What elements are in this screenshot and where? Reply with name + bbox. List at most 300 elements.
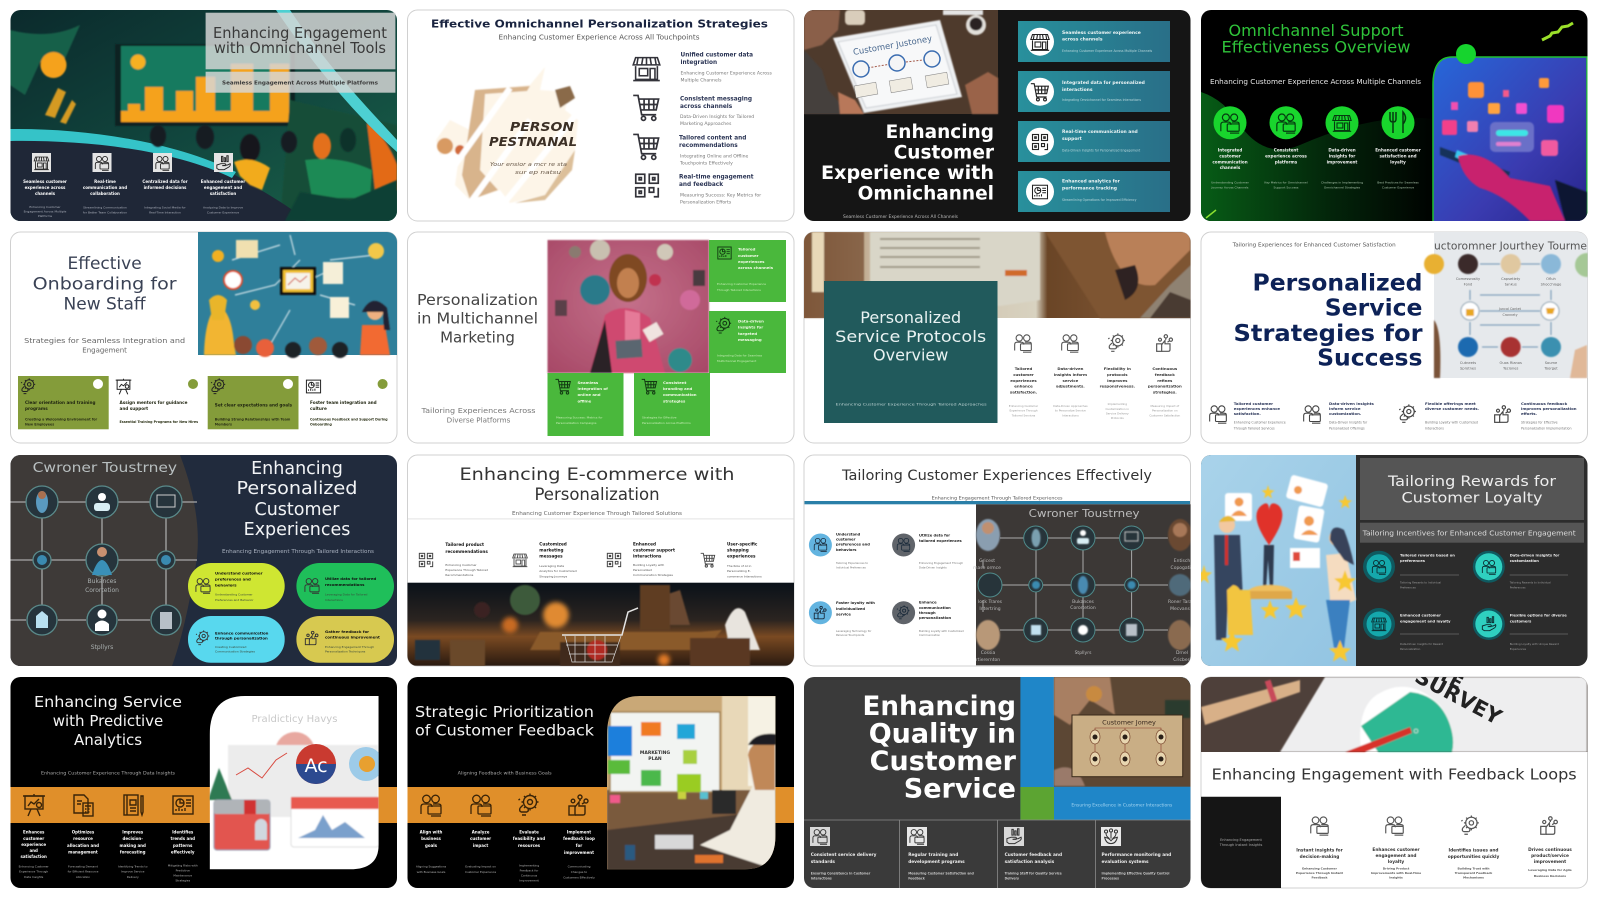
title: Tailoring Customer Experiences Effectively	[841, 468, 1152, 484]
column headings: Continuous	[1152, 366, 1178, 371]
image: sliced personalization graphic: sur ep natsu	[515, 170, 562, 176]
strategy headings: integration	[680, 60, 717, 66]
feature descriptions	[24, 205, 243, 218]
panel: Enhancing Engagement with Feedback Loops	[1201, 664, 1588, 888]
feature descriptions: Enhancing Customer	[445, 563, 477, 567]
green feature boxes: across channels	[738, 265, 774, 270]
feature headings: experiences	[727, 554, 756, 558]
item descriptions: Individual Preferences	[836, 566, 866, 570]
column descriptions: Experience Through	[1009, 408, 1038, 412]
column descriptions	[1009, 402, 1180, 420]
column headings: Data-driven	[1057, 366, 1084, 371]
action headings: customer	[470, 836, 491, 841]
loop headings: Instant insights for	[1296, 848, 1344, 854]
benefit headings: and	[29, 848, 38, 853]
image: predictive analytics dashboard	[208, 696, 383, 870]
photo: customer journey chalkboard: Stpllyrs	[91, 644, 113, 651]
pill cards: Enhance communication	[215, 630, 269, 636]
icon circles	[809, 534, 915, 624]
loop descriptions: Transparent Feedback	[1455, 871, 1493, 875]
green feature boxes: communication	[663, 392, 697, 397]
feature labels: Centralized data for	[142, 179, 188, 184]
photo: customer journey whiteboard: Capsetlety	[1501, 277, 1521, 281]
subtitle: Enhancing Customer Experience Through Tailored Solutions	[512, 511, 682, 517]
feature labels: customer	[1219, 154, 1241, 158]
feature descriptions: Best Practices for Seamless	[1377, 180, 1419, 184]
standards descriptions: Measuring Customer Satisfaction and	[908, 872, 974, 876]
subtitle	[24, 337, 185, 354]
title: Enhancing Engagement with Feedback Loops	[1212, 766, 1577, 784]
loop headings	[1296, 847, 1572, 865]
action headings: Analyze	[472, 830, 490, 834]
title: Marketing	[440, 328, 515, 346]
pill cards: Communication Strategies	[215, 650, 255, 654]
feature descriptions: Support Success	[1274, 186, 1299, 190]
title box	[1360, 458, 1584, 520]
reward headings: Enhanced customer	[1400, 614, 1441, 618]
green block	[1020, 787, 1054, 820]
green feature boxes: Integrating Data for Seamless	[717, 354, 763, 358]
blue caption: Ensuring Excellence in Customer Interactions	[1071, 802, 1172, 808]
feature labels: satisfaction	[210, 191, 236, 196]
strategy headings	[1234, 401, 1577, 416]
image: sliced personalization graphic: PESTNANAL	[489, 135, 577, 149]
photo: customer journey whiteboard: Teciones	[1502, 366, 1518, 370]
step cards: Set clear expectations and goals	[215, 402, 293, 408]
benefit headings: patterns	[173, 843, 193, 848]
photo: customer journey whiteboard: Comessrosity	[1456, 277, 1481, 281]
panel: Tailoring Customer Experiences Effectively	[804, 455, 1194, 666]
column descriptions: Interactions	[1062, 414, 1079, 418]
pill cards: Leveraging Data for Tailored	[325, 592, 368, 596]
title: Service	[904, 774, 1016, 804]
icons	[1311, 815, 1557, 835]
subtitle box	[1360, 523, 1584, 543]
benefit descriptions: Identifying Trends to	[118, 864, 148, 868]
standards headings	[811, 852, 1171, 865]
feature descriptions: Shopping Journeys	[539, 574, 568, 578]
panel: Enhancing Service with Predictive Analytics	[10, 677, 397, 888]
item descriptions: Tailoring Experiences to	[835, 561, 868, 565]
standards descriptions: Processes	[1102, 876, 1119, 880]
strategy headings: and feedback	[679, 182, 723, 188]
title: of Customer Feedback	[415, 722, 594, 740]
benefit descriptions: Mitigating Risks with	[168, 864, 198, 868]
loop descriptions: Business Decisions	[1534, 874, 1566, 878]
feature cards: Integrated data for personalized	[1062, 80, 1145, 86]
illustration: onboarding network	[198, 232, 397, 358]
panel: Enhancing Customer Experience with Omnichannel	[804, 10, 1190, 221]
title: Omnichannel	[858, 184, 994, 204]
loop descriptions: Feedback	[1311, 876, 1329, 880]
blue rule	[804, 501, 1190, 504]
action descriptions: Communicating	[568, 864, 591, 868]
feature descriptions	[1211, 180, 1419, 190]
benefit headings: Identifies	[172, 830, 194, 834]
reward descriptions: Experiences	[1510, 647, 1527, 651]
green feature boxes: Multichannel Engagement	[717, 359, 757, 363]
footer subtitle: Seamless Customer Experience Across All Channels	[843, 214, 959, 220]
illustration: customers with heart and stars	[1196, 455, 1356, 666]
strategy headings: recommendations	[679, 143, 738, 149]
strategy headings: Flexible offerings meet	[1425, 401, 1476, 406]
step cards: culture	[310, 406, 327, 411]
item descriptions: Personal Touchpoints	[836, 633, 865, 637]
feature cards: performance tracking	[1062, 186, 1117, 192]
photo: customer journey whiteboard: Cutneets	[1460, 361, 1476, 365]
action descriptions: Aligning Suggestions	[416, 864, 447, 868]
feature descriptions: for Better Team Collaboration	[83, 210, 127, 214]
strategy descriptions: Data-Driven Insights for	[1329, 420, 1368, 424]
benefit headings: forecasting	[120, 850, 146, 854]
title	[33, 254, 177, 314]
pill cards: Enhancing Engagement Through	[325, 645, 374, 649]
feature labels: experience across	[1265, 154, 1307, 158]
photo: customer journey whiteboard: Cronnety	[1502, 313, 1518, 317]
title	[415, 703, 594, 740]
column headings: personalization	[1148, 384, 1182, 388]
benefit headings: decision-	[123, 836, 143, 841]
image: sliced personalization graphic	[436, 67, 578, 208]
title box: with Omnichannel Tools	[214, 39, 386, 57]
action headings: business	[421, 836, 442, 841]
loop descriptions: Building Trust with	[1458, 866, 1489, 870]
standards headings: Consistent service delivery	[811, 852, 877, 858]
green feature boxes: Data-driven	[738, 318, 764, 324]
photo: monitor and man	[804, 232, 1191, 318]
strategy headings: customization.	[1329, 411, 1362, 416]
feature descriptions: Customer Experience	[207, 210, 239, 214]
feature cards: Enhancing Customer Experience Across Multiple Channels	[1062, 49, 1152, 53]
teal title panel: Personalized	[860, 308, 961, 327]
feature labels: Real-time	[94, 179, 116, 184]
title box: Enhancing Engagement	[213, 24, 387, 42]
item headings: customer	[836, 538, 856, 542]
benefit descriptions: Maintenance	[173, 874, 192, 878]
loop descriptions: Experience Through Instant	[1296, 871, 1344, 875]
reward headings	[1400, 554, 1567, 624]
column descriptions: Measuring Impact of	[1150, 404, 1180, 408]
pill cards: Gather feedback for	[325, 629, 369, 634]
feature descriptions: Enhancing Customer	[29, 205, 61, 209]
green feature boxes	[548, 240, 786, 436]
item headings: Understand	[836, 532, 861, 536]
feature descriptions: Analytics for Customized	[539, 569, 577, 573]
reward headings: customers	[1510, 620, 1532, 624]
title: Success	[1317, 344, 1422, 372]
title	[821, 122, 995, 204]
benefit descriptions: Experience Through	[19, 870, 48, 874]
strategy descriptions: Multiple Channels	[680, 78, 722, 84]
photo: customer journey board on table: Customer Jomey	[1102, 718, 1156, 726]
photo: customer journey whiteboard: Soume	[1545, 361, 1558, 365]
pill cards: continuous improvement	[325, 634, 380, 640]
loop headings: decision-making	[1300, 854, 1339, 860]
strategy descriptions: Touchpoints Effectively	[679, 160, 733, 166]
title	[862, 691, 1017, 804]
feature descriptions: Experience Through Tailored	[445, 568, 488, 572]
feature labels: experience across	[25, 185, 66, 190]
image: predictive analytics dashboard: Praldicticy Havys	[252, 714, 338, 725]
title: Customer	[254, 500, 340, 520]
green feature boxes: strategies	[663, 398, 686, 404]
title: Quality in	[869, 718, 1016, 750]
strategy descriptions: Integrating Online and Offline	[680, 154, 749, 160]
item headings: tailored experiences	[919, 539, 962, 543]
pill cards: Utilize data for tailored	[325, 576, 377, 581]
item headings: individualized	[836, 607, 865, 611]
title box: Customer Loyalty	[1402, 490, 1543, 506]
benefit descriptions: Data Insights	[24, 875, 44, 879]
photo: customer journey chalkboard: mase ormce	[973, 565, 1001, 571]
dark side block: Enhancing Engagement	[1220, 838, 1263, 842]
reward descriptions: Tailoring Rewards to Individual	[1399, 580, 1441, 584]
reward dividers	[1400, 575, 1568, 634]
feature cards	[1018, 21, 1170, 212]
feature descriptions: Omnichannel Strategies	[1324, 186, 1361, 190]
pill cards	[188, 563, 394, 663]
title: Analytics	[74, 731, 142, 749]
photo: customer journey chalkboard: Copogatio	[1171, 565, 1194, 571]
title: Strategies for	[1234, 319, 1423, 347]
panel: Tailoring Rewards for Customer Loyalty	[1196, 455, 1588, 666]
standards descriptions: Delivery	[1005, 876, 1019, 880]
pill cards: Creating Customized	[215, 645, 246, 649]
photo: customer journey whiteboard	[1424, 232, 1599, 378]
title: Enhancing	[251, 459, 343, 479]
column descriptions: Customization in	[1106, 407, 1129, 411]
standards descriptions: Interactions	[811, 876, 832, 880]
title: Enhancing	[886, 122, 994, 143]
standards headings: Regular training and	[908, 852, 958, 858]
photo: customer journey on table	[804, 10, 998, 114]
green feature boxes: Personalization Campaigns	[556, 421, 597, 425]
image: predictive analytics dashboard: Ac	[304, 755, 328, 777]
photo: customer journey chalkboard: Bukances	[1072, 599, 1094, 605]
feature labels: platforms	[1275, 160, 1298, 164]
reward headings: Flexible options for diverse	[1510, 614, 1567, 618]
feature descriptions: The Role of AI in	[726, 564, 752, 568]
title	[34, 693, 182, 749]
photo: man planning at whiteboard	[607, 696, 776, 870]
step cards: and support	[120, 406, 148, 411]
subtitle: Enhancing Customer Experience Across Multiple Channels	[1210, 78, 1421, 86]
reward headings: Data-driven insights for	[1510, 554, 1560, 558]
column headings: Flexibility in	[1104, 366, 1131, 371]
panel: Enhancing Quality in Customer Service	[804, 677, 1190, 888]
benefit headings: making and	[119, 843, 146, 848]
strategy headings: Tailored customer	[1234, 401, 1273, 406]
photo: woman in pink surrounded by objects	[548, 240, 709, 373]
item headings: preferences and	[836, 542, 870, 546]
feature headings: recommendations	[445, 549, 488, 554]
green feature boxes: customer	[738, 253, 759, 258]
column descriptions: Personalization on	[1152, 408, 1178, 412]
loop headings: Drives continuous	[1528, 847, 1572, 853]
feature headings: interactions	[633, 554, 662, 558]
item descriptions	[835, 561, 964, 637]
photo: customer journey chalkboard: Roner Tara	[1168, 599, 1192, 605]
feature headings: shopping	[727, 548, 749, 552]
action descriptions: Improvement	[519, 878, 540, 882]
panel: Personalized Service Protocols Overview	[804, 232, 1191, 443]
action descriptions: Changes to	[571, 870, 587, 874]
loop descriptions	[1296, 866, 1572, 880]
feature labels: channels	[35, 191, 56, 196]
reward headings: customization	[1510, 559, 1539, 563]
feature headings: Tailored product	[445, 542, 484, 547]
icons	[1210, 404, 1510, 423]
strategy headings	[679, 52, 754, 188]
strategy descriptions: Marketing Approaches	[680, 121, 732, 127]
standards headings: Performance monitoring and	[1102, 852, 1171, 858]
action headings: Implement	[567, 830, 591, 834]
loop descriptions: Improvements with Real-Time	[1371, 871, 1421, 875]
feature cards: Integrating Omnichannel for Seamless Interactions	[1062, 98, 1141, 102]
subtitle box	[206, 72, 395, 93]
photo: customer journey chalkboard: Corortetion	[1070, 605, 1096, 611]
benefit headings: satisfaction	[20, 854, 47, 859]
strategy headings: diverse customer needs.	[1425, 406, 1480, 411]
icons	[1015, 333, 1172, 352]
panel: Enhancing E-commerce with Personalization	[408, 455, 794, 666]
column descriptions: Service Delivery	[1106, 412, 1129, 416]
photo: survey sheet with pie chart and pencils: SURVEY	[1411, 664, 1506, 730]
action descriptions: Feedback for	[520, 868, 539, 872]
column headings: satisfaction.	[1010, 390, 1038, 394]
photo: customer journey whiteboard: Fond	[1464, 282, 1472, 286]
feature labels: insights for	[1329, 154, 1355, 158]
title box	[206, 13, 395, 69]
standards icons	[810, 827, 1121, 846]
panel: Effective Omnichannel Personalization Strategies	[408, 10, 794, 221]
photo: customer journey whiteboard: Sprotnes	[1460, 366, 1476, 370]
feature cards: Enhanced analytics for	[1062, 178, 1121, 184]
standards headings: evaluation systems	[1102, 859, 1149, 865]
step cards: Continuous Feedback and Support During	[310, 418, 388, 422]
pill cards: behaviors	[215, 582, 237, 588]
title	[1234, 268, 1423, 372]
title: Strategic Prioritization	[415, 703, 594, 721]
reward headings: preferences	[1400, 559, 1426, 563]
title	[460, 465, 734, 504]
photo: survey sheet with pie chart and pencils	[1201, 677, 1588, 754]
reward descriptions: Preferences	[1400, 586, 1416, 590]
panel: Omnichannel Support Effectiveness Overview	[1201, 10, 1588, 225]
column descriptions: Enhancing Customer	[1009, 404, 1039, 408]
standards headings: standards	[811, 859, 835, 865]
column headings: strategies.	[1153, 390, 1177, 394]
action descriptions: with Business Goals	[417, 870, 446, 874]
photo: customer journey chalkboard: rtierernton	[976, 657, 1000, 663]
subtitle: Enhancing Engagement Through Tailored Experiences	[932, 496, 1063, 500]
column headings: insights inform	[1054, 372, 1087, 377]
loop descriptions: Leveraging Data for Agile	[1528, 868, 1572, 872]
small heading: Tailoring Experiences for Enhanced Customer Satisfaction	[1232, 242, 1396, 248]
column headings: refines	[1157, 378, 1173, 383]
feature labels: collaboration	[90, 191, 120, 196]
action headings: resources	[518, 843, 541, 848]
title: Onboarding for	[33, 274, 177, 294]
photo: customer journey chalkboard: Cwroner Toustrney	[1029, 508, 1140, 520]
feature labels	[23, 179, 245, 196]
step cards: Clear orientation and training	[25, 400, 95, 405]
benefit headings: experience	[21, 842, 46, 847]
column headings: feedback	[1155, 372, 1175, 377]
column headings: adjustments.	[1056, 384, 1085, 388]
action headings: Align with	[420, 830, 443, 834]
strategy descriptions: Interactions	[1425, 426, 1444, 430]
feature descriptions: Leveraging Data	[539, 564, 564, 568]
strategy headings: Consistent messaging	[680, 96, 752, 102]
image: sliced personalization graphic: PERSON	[510, 120, 574, 134]
green feature boxes: Measuring Success: Metrics for	[556, 416, 603, 420]
strategy headings: Data-driven insights	[1329, 401, 1374, 406]
step cards: programs	[25, 406, 48, 411]
feature cards: Seamless customer experience	[1062, 30, 1141, 36]
benefit headings: effectively	[171, 850, 195, 854]
loop headings: product/service	[1531, 853, 1569, 859]
benefit descriptions	[19, 864, 198, 882]
photo: customer journey on table: Customer Justoney	[852, 34, 933, 58]
photo: customer journey chalkboard	[973, 504, 1194, 665]
action descriptions: Continuous	[521, 874, 538, 878]
action headings: for	[576, 843, 582, 848]
reward descriptions	[1399, 580, 1559, 651]
title	[236, 459, 358, 540]
benefit headings: customer	[23, 836, 44, 841]
squiggle accent	[1542, 23, 1573, 40]
photo: survey sheet with pie chart and pencils: TE	[1435, 664, 1466, 694]
green feature boxes: Through Tailored Interactions	[716, 288, 761, 292]
feature labels: communication and	[83, 185, 127, 190]
title: Personalization	[417, 291, 538, 309]
column headings: enhance	[1014, 384, 1033, 388]
photo: customer journey whiteboard: tankus	[1505, 282, 1517, 286]
benefit headings: trends and	[170, 836, 195, 841]
photo: man planning at whiteboard: PLAN	[648, 756, 662, 762]
feature descriptions: Challenges in Implementing	[1321, 180, 1363, 184]
benefit headings	[20, 830, 195, 859]
benefit descriptions: Strategies	[175, 878, 191, 882]
strategy headings: inform service	[1329, 406, 1361, 411]
reward descriptions: Preferences	[1510, 586, 1526, 590]
pill cards: Understand customer	[215, 570, 263, 576]
loop descriptions: Enhancing Customer	[1302, 866, 1337, 870]
feature labels: engagement and	[204, 185, 242, 190]
title: Personalized	[1252, 268, 1422, 296]
feature labels: Consistent	[1274, 148, 1298, 152]
photo: man planning at whiteboard: MARKETING	[640, 750, 670, 756]
photo: customer journey whiteboard: Toorget	[1543, 366, 1558, 370]
green feature boxes: integration of	[578, 386, 608, 391]
step cards: Foster team integration and	[310, 400, 377, 405]
benefit headings: Optimizes	[72, 830, 95, 834]
title: Experiences	[244, 520, 350, 540]
icons	[23, 794, 193, 816]
loop descriptions: Mechanisms	[1463, 876, 1484, 880]
photo: customer journey chalkboard	[10, 455, 198, 666]
subtitle: Diverse Platforms	[447, 416, 511, 424]
subtitle: Enhancing Customer Experience Across All Touchpoints	[498, 34, 700, 42]
benefit descriptions: Enhancing Customer	[19, 864, 50, 868]
photo: customer journey chalkboard: Corortetion	[85, 587, 119, 594]
item headings	[836, 532, 962, 620]
column descriptions: Customer Satisfaction	[1149, 414, 1180, 418]
item headings: Utilize data for	[919, 534, 950, 538]
illustration: phone with glowing apps	[1433, 57, 1587, 225]
action headings: feedback loop	[563, 836, 595, 841]
